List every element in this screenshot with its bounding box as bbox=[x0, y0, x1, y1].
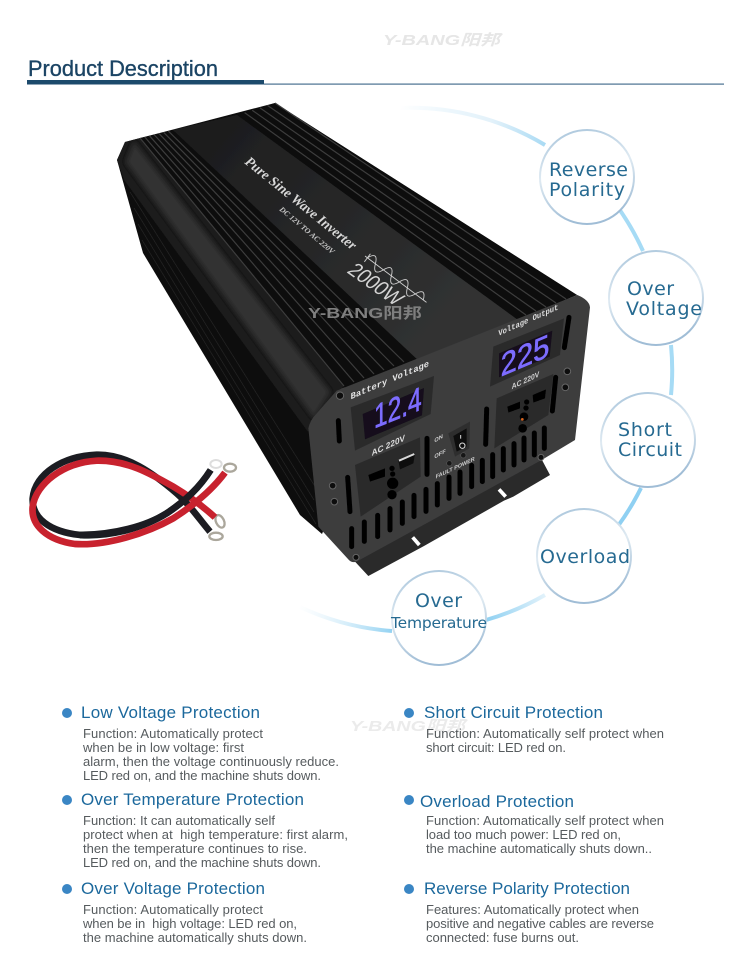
circle: Over Temperature: Temperature bbox=[390, 614, 487, 632]
item: Overload Protection: the machine automatically shuts down.. bbox=[426, 841, 652, 856]
circle: Short Circuit: Circuit bbox=[618, 439, 682, 461]
item: Over Temperature Protection: Function: It can automatically self bbox=[83, 813, 275, 828]
circle: Overload bbox=[537, 509, 631, 603]
indicator LEDs bbox=[447, 453, 466, 466]
item: Overload Protection: Overload Protection bbox=[420, 792, 574, 811]
circle: Overload: Overload bbox=[540, 546, 630, 568]
inverter top fins bbox=[140, 103, 577, 388]
item: Reverse Polarity Protection: positive and negative cables are reverse bbox=[426, 916, 654, 931]
item: Over Voltage Protection: the machine automatically shuts down. bbox=[83, 930, 307, 945]
circle: Over Temperature: Over bbox=[415, 590, 462, 612]
item: Over Temperature Protection: LED red on, and the machine shuts down. bbox=[83, 855, 321, 870]
item: Over Temperature Protection: Over Temperature Protection bbox=[81, 790, 304, 809]
screws bbox=[329, 368, 571, 560]
circle: Short Circuit bbox=[601, 393, 695, 487]
labels: ON OFF FAULT POWER: FAULT POWER bbox=[436, 456, 475, 481]
item: Over Temperature Protection bbox=[62, 790, 348, 870]
heading underline bbox=[27, 80, 724, 85]
circle: Reverse Polarity: Polarity bbox=[549, 179, 625, 201]
display: voltage output 225: 225 bbox=[501, 328, 549, 384]
item: Reverse Polarity Protection: Reverse Polarity Protection bbox=[424, 879, 630, 898]
connecting ring arcs bbox=[300, 108, 672, 631]
item: Over Voltage Protection: Function: Automatically protect bbox=[83, 902, 263, 917]
display: battery voltage 12.4: 12.4 bbox=[374, 381, 422, 436]
vent slots bbox=[338, 317, 569, 547]
circle: Over Voltage bbox=[609, 251, 703, 345]
inverter top bevel bbox=[117, 138, 345, 432]
labels: ON OFF FAULT POWER bbox=[434, 433, 475, 481]
red cable crossing bbox=[180, 473, 225, 514]
labels: ON OFF FAULT POWER: ON bbox=[434, 433, 443, 445]
item: Low Voltage Protection: LED red on, and the machine shuts down. bbox=[83, 768, 321, 783]
inverter product illustration bbox=[117, 103, 590, 576]
socket: right outlet bbox=[494, 374, 553, 448]
item: Over Voltage Protection: when be in high voltage: LED red on, bbox=[82, 916, 297, 931]
watermark: top logo: Y-BANG阳邦 bbox=[383, 32, 504, 49]
circle: Over Voltage: Over bbox=[627, 278, 674, 300]
circle: Reverse Polarity bbox=[540, 130, 634, 224]
item: Overload Protection bbox=[404, 792, 664, 856]
label: Voltage Output: Voltage Output bbox=[498, 303, 558, 339]
heading: Product Description: Product Description bbox=[28, 56, 218, 81]
label: DC 12V TO AC 220V: DC 12V TO AC 220V bbox=[277, 204, 337, 257]
battery cables bbox=[32, 455, 236, 544]
watermark: middle logo: Y-BANG阳邦 bbox=[350, 718, 469, 735]
item: Short Circuit Protection: Short Circuit Protection bbox=[424, 703, 603, 722]
item: Reverse Polarity Protection: connected: fuse burns out. bbox=[426, 930, 579, 945]
circle: Short Circuit: Short bbox=[618, 419, 672, 441]
item: Short Circuit Protection: short circuit: LED red on. bbox=[426, 740, 566, 755]
item: Short Circuit Protection bbox=[404, 703, 664, 755]
inverter front panel bbox=[308, 295, 590, 576]
mounting foot bbox=[355, 459, 550, 576]
item: Overload Protection: Function: Automatically self protect when bbox=[426, 813, 664, 828]
circle: Over Temperature bbox=[390, 571, 487, 665]
red cable bbox=[32, 461, 225, 544]
item: Low Voltage Protection: alarm, then the voltage continuously reduce. bbox=[83, 754, 339, 769]
item: Low Voltage Protection bbox=[62, 703, 339, 783]
item: Short Circuit Protection: Function: Automatically self protect when bbox=[426, 726, 664, 741]
rocker switch bbox=[448, 422, 470, 457]
inverter top flat label area bbox=[173, 115, 518, 362]
black cable bbox=[33, 455, 211, 535]
item: Over Voltage Protection bbox=[62, 879, 307, 945]
item: Reverse Polarity Protection bbox=[404, 879, 654, 945]
label: 2000W: 2000W bbox=[342, 260, 408, 310]
item: Over Voltage Protection: Over Voltage Protection bbox=[81, 879, 265, 898]
label: Battery Voltage: Battery Voltage bbox=[351, 358, 429, 402]
panel plate bbox=[308, 295, 590, 562]
inverter side body bbox=[117, 160, 360, 534]
inverter top base bbox=[117, 103, 577, 432]
labels: ON OFF FAULT POWER: OFF bbox=[434, 449, 446, 461]
watermark: logo on inverter: Y-BANG阳邦 bbox=[308, 305, 422, 322]
item: Overload Protection: load too much power: LED red on, bbox=[426, 827, 621, 842]
item: Over Temperature Protection: then the temperature continues to rise. bbox=[83, 841, 307, 856]
item: Low Voltage Protection: Low Voltage Protection bbox=[81, 703, 260, 722]
ring terminals bbox=[209, 460, 236, 540]
item: Over Temperature Protection: protect when at high temperature: first alarm, bbox=[83, 827, 348, 842]
label: AC 220V left: AC 220V bbox=[372, 432, 406, 458]
circle: Reverse Polarity: Reverse bbox=[549, 159, 628, 181]
display: voltage output 225 bbox=[490, 318, 564, 387]
item: Low Voltage Protection: when be in low voltage: first bbox=[82, 740, 244, 755]
item: Low Voltage Protection: Function: Automatically protect bbox=[83, 726, 263, 741]
display: battery voltage 12.4 bbox=[351, 376, 434, 451]
black cable crossing bbox=[80, 470, 211, 535]
item: Reverse Polarity Protection: Features: Automatically protect when bbox=[426, 902, 639, 917]
circle: Over Voltage: Voltage bbox=[626, 298, 702, 320]
label: AC 220V right: AC 220V bbox=[512, 370, 540, 391]
label: Pure Sine Wave Inverter: Pure Sine Wave Inverter bbox=[241, 154, 359, 254]
label: sine wave mark bbox=[361, 251, 430, 307]
socket: left outlet bbox=[355, 437, 421, 517]
